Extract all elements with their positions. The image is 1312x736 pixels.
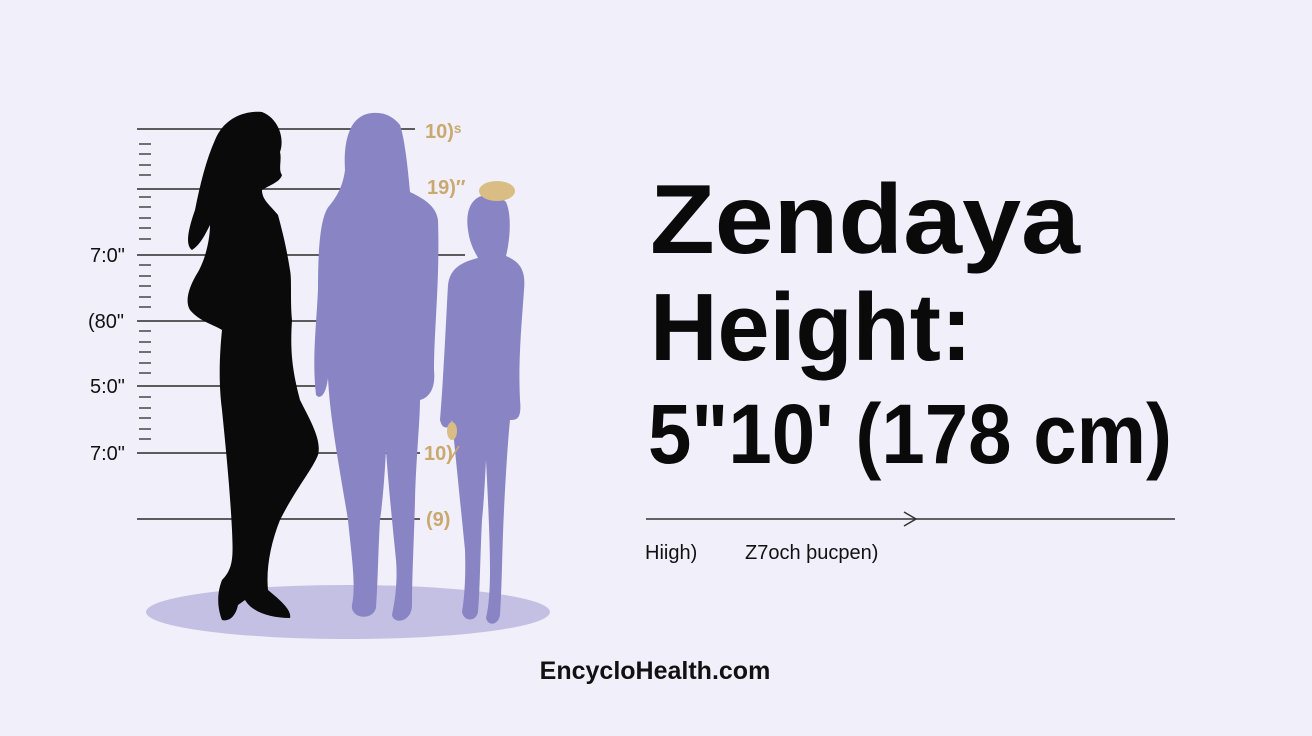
height labels (right, tan): (9) xyxy=(426,509,450,531)
height labels (right, tan): 10)⁄ xyxy=(424,443,461,465)
ruler labels xyxy=(88,245,125,465)
ruler labels: (80" xyxy=(88,311,124,333)
ground ellipse xyxy=(146,585,550,639)
purple silhouette: girl xyxy=(440,195,524,624)
arrow line xyxy=(646,512,1175,526)
title xyxy=(648,164,1172,481)
height chart ruler xyxy=(137,129,465,519)
height labels (right, tan) xyxy=(424,121,466,531)
caption labels xyxy=(645,542,878,564)
title: Height: xyxy=(650,274,972,381)
caption labels: Hiigh) xyxy=(645,542,697,564)
height labels (right, tan): 19)″ xyxy=(427,177,466,199)
ruler labels: 7:0" xyxy=(90,245,125,267)
tan accents xyxy=(479,181,515,201)
height labels (right, tan): 10)ˢ xyxy=(425,121,462,143)
purple silhouette: woman xyxy=(314,113,438,621)
footer: EncycloHealth.com xyxy=(540,657,770,685)
title: Zendaya xyxy=(650,164,1082,274)
black silhouette: Zendaya xyxy=(188,112,319,620)
ruler labels: 5:0" xyxy=(90,376,125,398)
title: 5"10' (178 cm) xyxy=(648,387,1172,481)
caption labels: Z7och þucpen) xyxy=(745,542,878,564)
ruler labels: 7:0" xyxy=(90,443,125,465)
